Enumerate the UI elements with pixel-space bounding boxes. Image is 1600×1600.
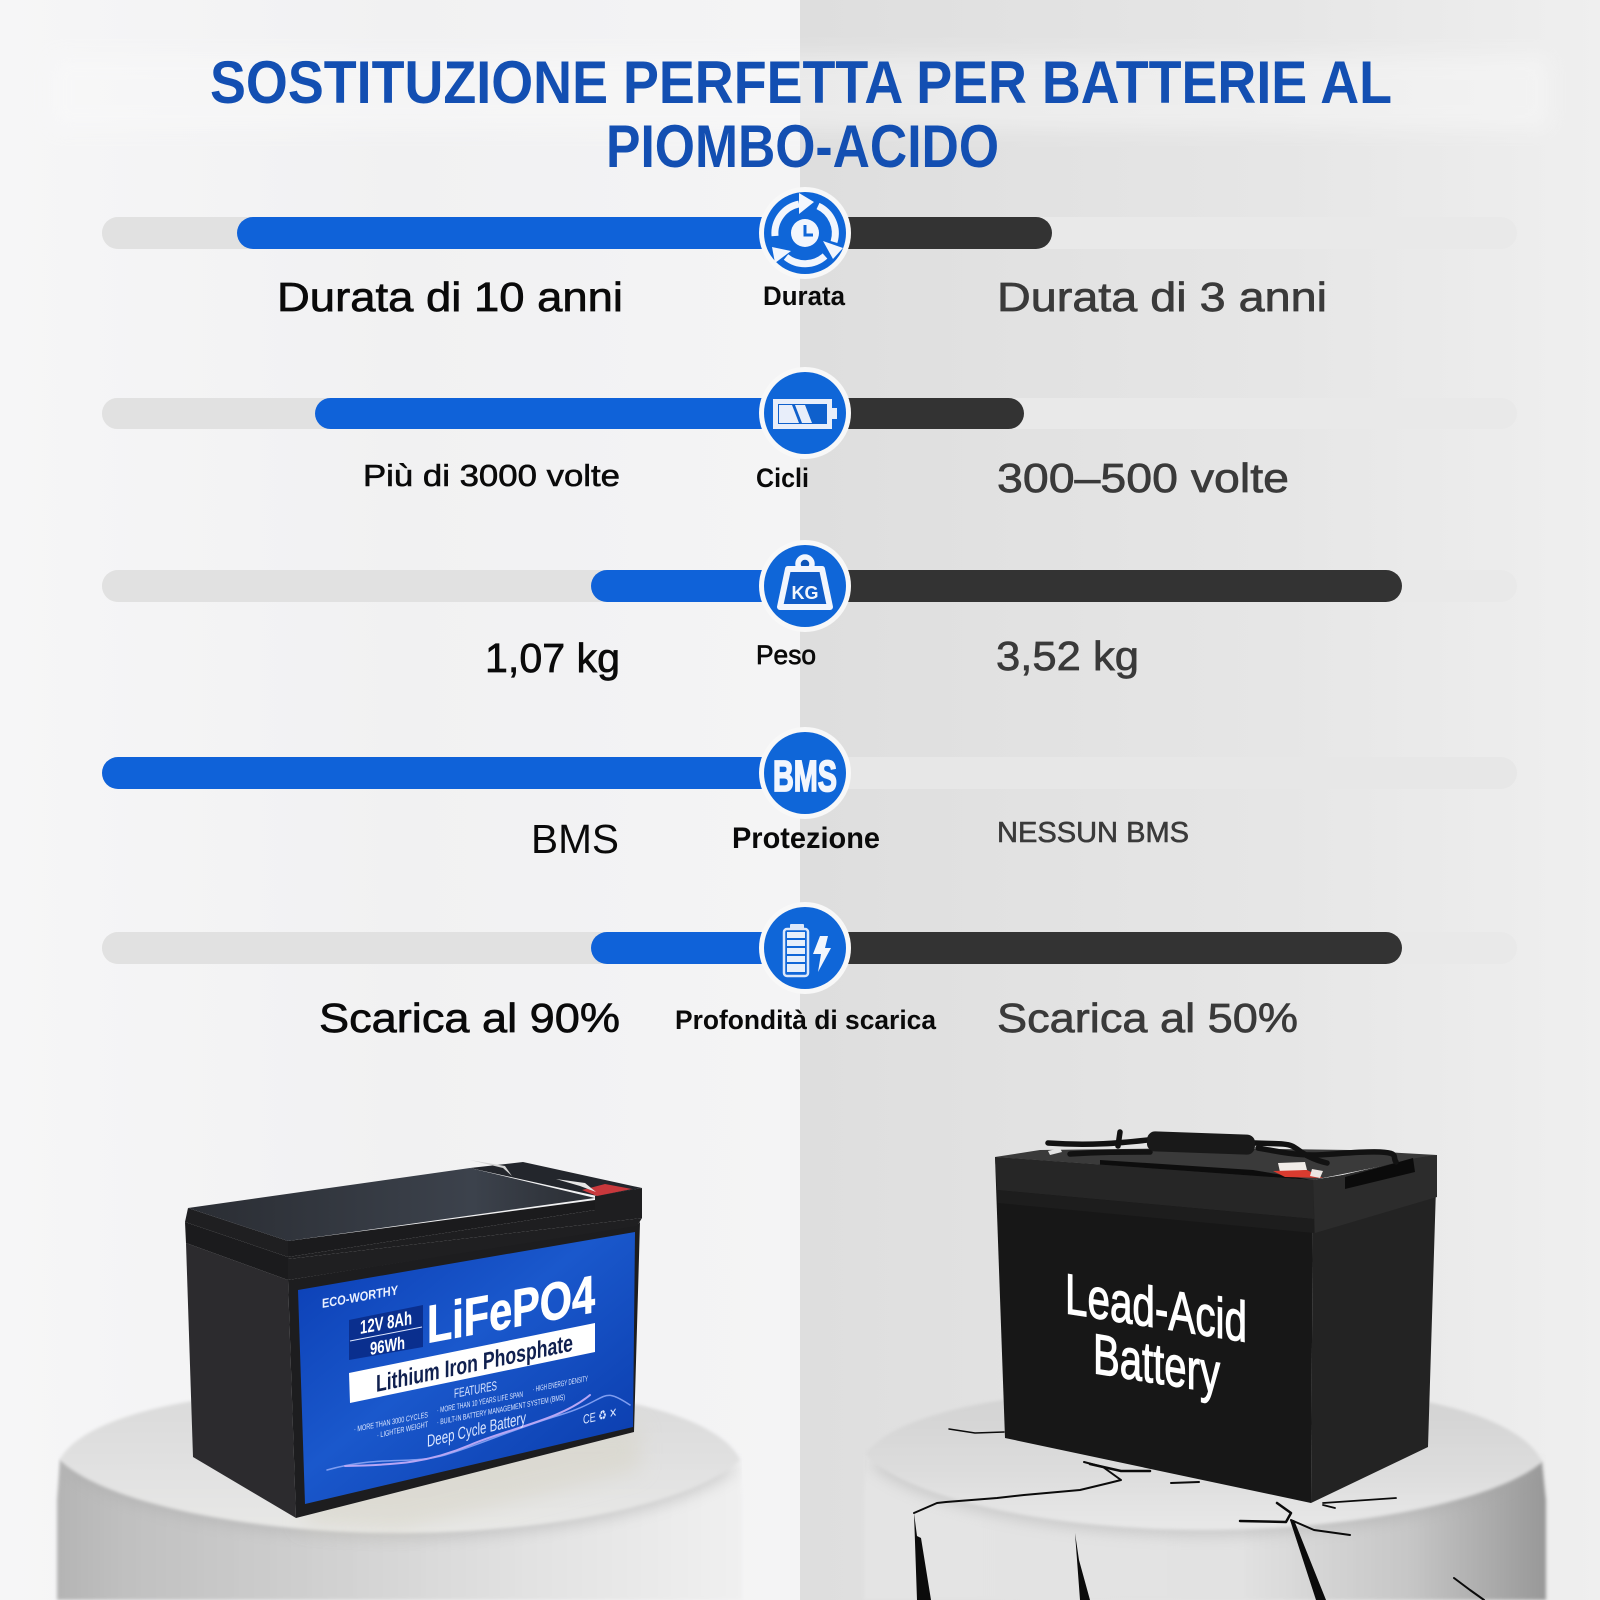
bar chart: durata (102, 217, 1517, 249)
value: 1,07 kg: 1,07 kg (485, 635, 620, 681)
value: 3,52 kg: 3,52 kg (996, 633, 1139, 679)
capacity box (349, 1305, 423, 1360)
capacity box: 96Wh (370, 1333, 405, 1359)
features text: · LIGHTER WEIGHT (377, 1420, 428, 1440)
features text: · MORE THAN 10 YEARS LIFE SPAN (437, 1390, 523, 1415)
value: 10 anni: Durata di 10 anni (277, 274, 623, 320)
bar chart: protezione (102, 757, 1517, 789)
value: più di 3000 volte: Più di 3000 volte (363, 458, 620, 493)
value: 300-500 volte: 300–500 volte (997, 455, 1289, 501)
icon: batteria (759, 367, 851, 459)
label: peso: Peso (756, 640, 816, 670)
white band (349, 1323, 595, 1403)
lifepo4 heading: LiFePO4 (427, 1265, 595, 1355)
battery body (185, 1160, 642, 1518)
battery: lifepo4 (185, 1160, 642, 1518)
features text: FEATURES (454, 1378, 497, 1401)
bar chart: scarica (102, 932, 1517, 964)
title (210, 49, 1392, 180)
panel: piedistallo destro (864, 1393, 1546, 1600)
title: PIOMBO-ACIDO (606, 113, 999, 180)
label: protezione: Protezione (732, 822, 880, 855)
bar chart: peso (102, 570, 1517, 602)
battery body (995, 1148, 1437, 1503)
capacity box: 12V 8Ah (360, 1308, 412, 1339)
panel: piedistallo sinistro (57, 1393, 742, 1600)
icon: peso kg: KG (792, 583, 818, 603)
features text: CE ♻ ✕ (583, 1405, 617, 1427)
features text: Deep Cycle Battery (427, 1407, 526, 1451)
row: cicli (102, 367, 1517, 501)
icon: peso kg (759, 540, 851, 632)
cracks in pedestal (914, 1429, 1484, 1600)
row: peso (102, 540, 1517, 681)
bar chart: cicli (102, 398, 1517, 429)
value: bms: BMS (531, 816, 619, 862)
battery: lead-acid (995, 1131, 1437, 1503)
icon: ciclo e orologio (759, 187, 851, 279)
label: profondità di scarica: Profondità di scarica (675, 1005, 937, 1035)
icon: batteria con fulmine (759, 902, 851, 994)
value: scarica al 90%: Scarica al 90% (319, 995, 620, 1041)
battery label text: Lead-Acid (1065, 1262, 1247, 1355)
battery label text (1065, 1262, 1247, 1406)
title: SOSTITUZIONE PERFETTA PER BATTERIE AL (210, 49, 1392, 116)
row: protezione (102, 727, 1517, 862)
features text: · MORE THAN 3000 CYCLES (354, 1410, 428, 1434)
features text: · HIGH ENERGY DENSITY (533, 1374, 588, 1394)
features text (354, 1374, 617, 1451)
row: profondità di scarica (102, 902, 1517, 1041)
label panel (298, 1232, 635, 1504)
value: scarica al 50%: Scarica al 50% (997, 995, 1298, 1041)
battery label text: Battery (1093, 1322, 1220, 1406)
value: nessun bms: NESSUN BMS (997, 817, 1189, 849)
label: cicli: Cicli (756, 463, 809, 493)
brand text: ECO-WORTHY (322, 1282, 398, 1311)
value: 3 anni: Durata di 3 anni (997, 274, 1327, 320)
row: durata (102, 187, 1517, 320)
features text: · BUILT-IN BATTERY MANAGEMENT SYSTEM (BMS) (437, 1392, 565, 1427)
label: durata: Durata (763, 281, 846, 311)
icon: bms (759, 727, 851, 819)
wave decoration (327, 1395, 630, 1470)
terminals and rope handle (1048, 1131, 1396, 1178)
icon: bms: BMS (773, 752, 837, 801)
white band: Lithium Iron Phosphate (376, 1330, 573, 1398)
